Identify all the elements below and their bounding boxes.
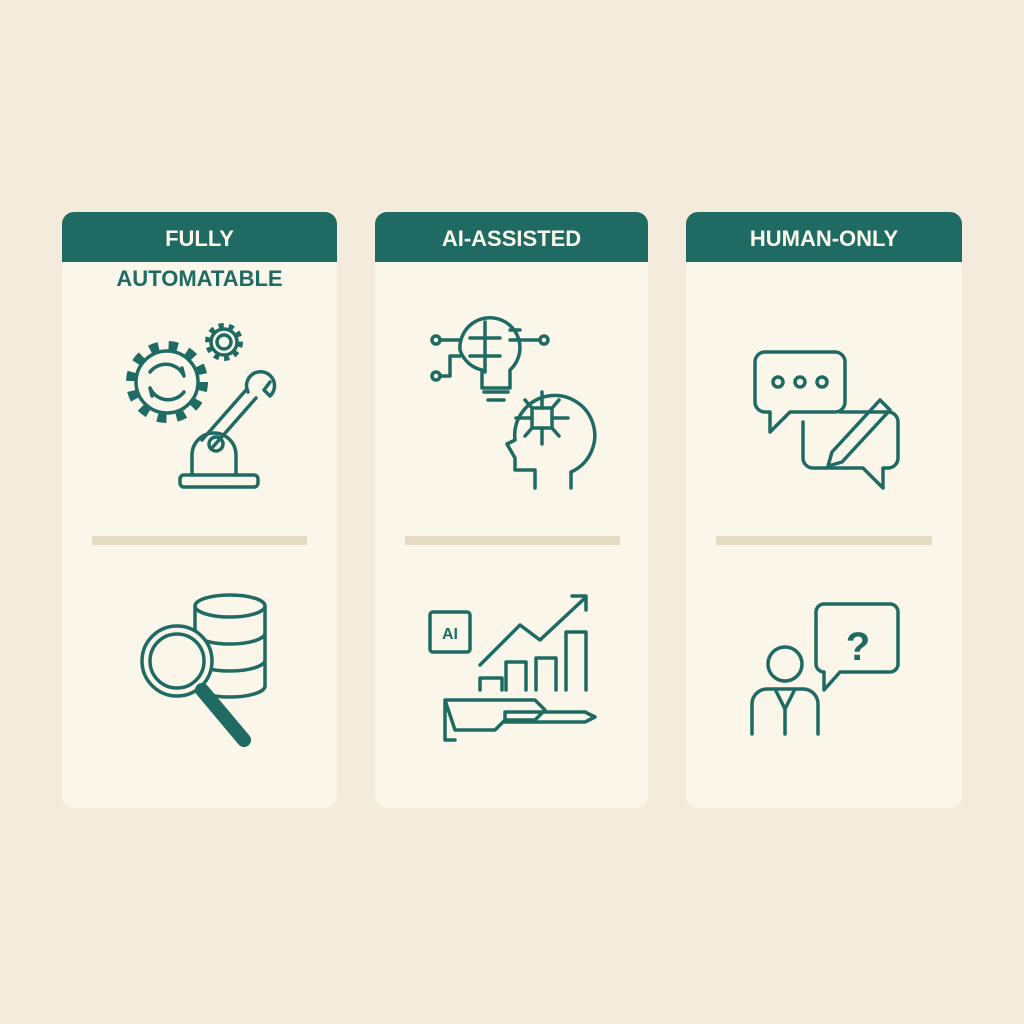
subheading: automatable: AUTOMATABLE [116, 266, 283, 291]
panel: ai-assisted [375, 212, 648, 808]
icon: person with question bubble: ? [846, 625, 870, 669]
icon: ai chip chart hand: AI [442, 626, 458, 643]
heading: human-only [686, 212, 962, 262]
icon: brain bulb and ai head [432, 318, 595, 488]
heading: fully [62, 212, 337, 262]
panel: fully automatable [62, 212, 337, 808]
icon: ai chip chart hand [430, 596, 595, 740]
icon: speech bubbles with pencil [755, 352, 898, 488]
heading: fully: FULLY [165, 226, 234, 251]
heading: ai-assisted: AI-ASSISTED [442, 226, 581, 251]
heading: human-only: HUMAN-ONLY [750, 226, 898, 251]
heading: ai-assisted [375, 212, 648, 262]
icon: person with question bubble [752, 604, 898, 734]
icon: gears and robot arm [131, 326, 275, 487]
icon: magnifier and database [142, 595, 265, 740]
panel: human-only [686, 212, 962, 808]
